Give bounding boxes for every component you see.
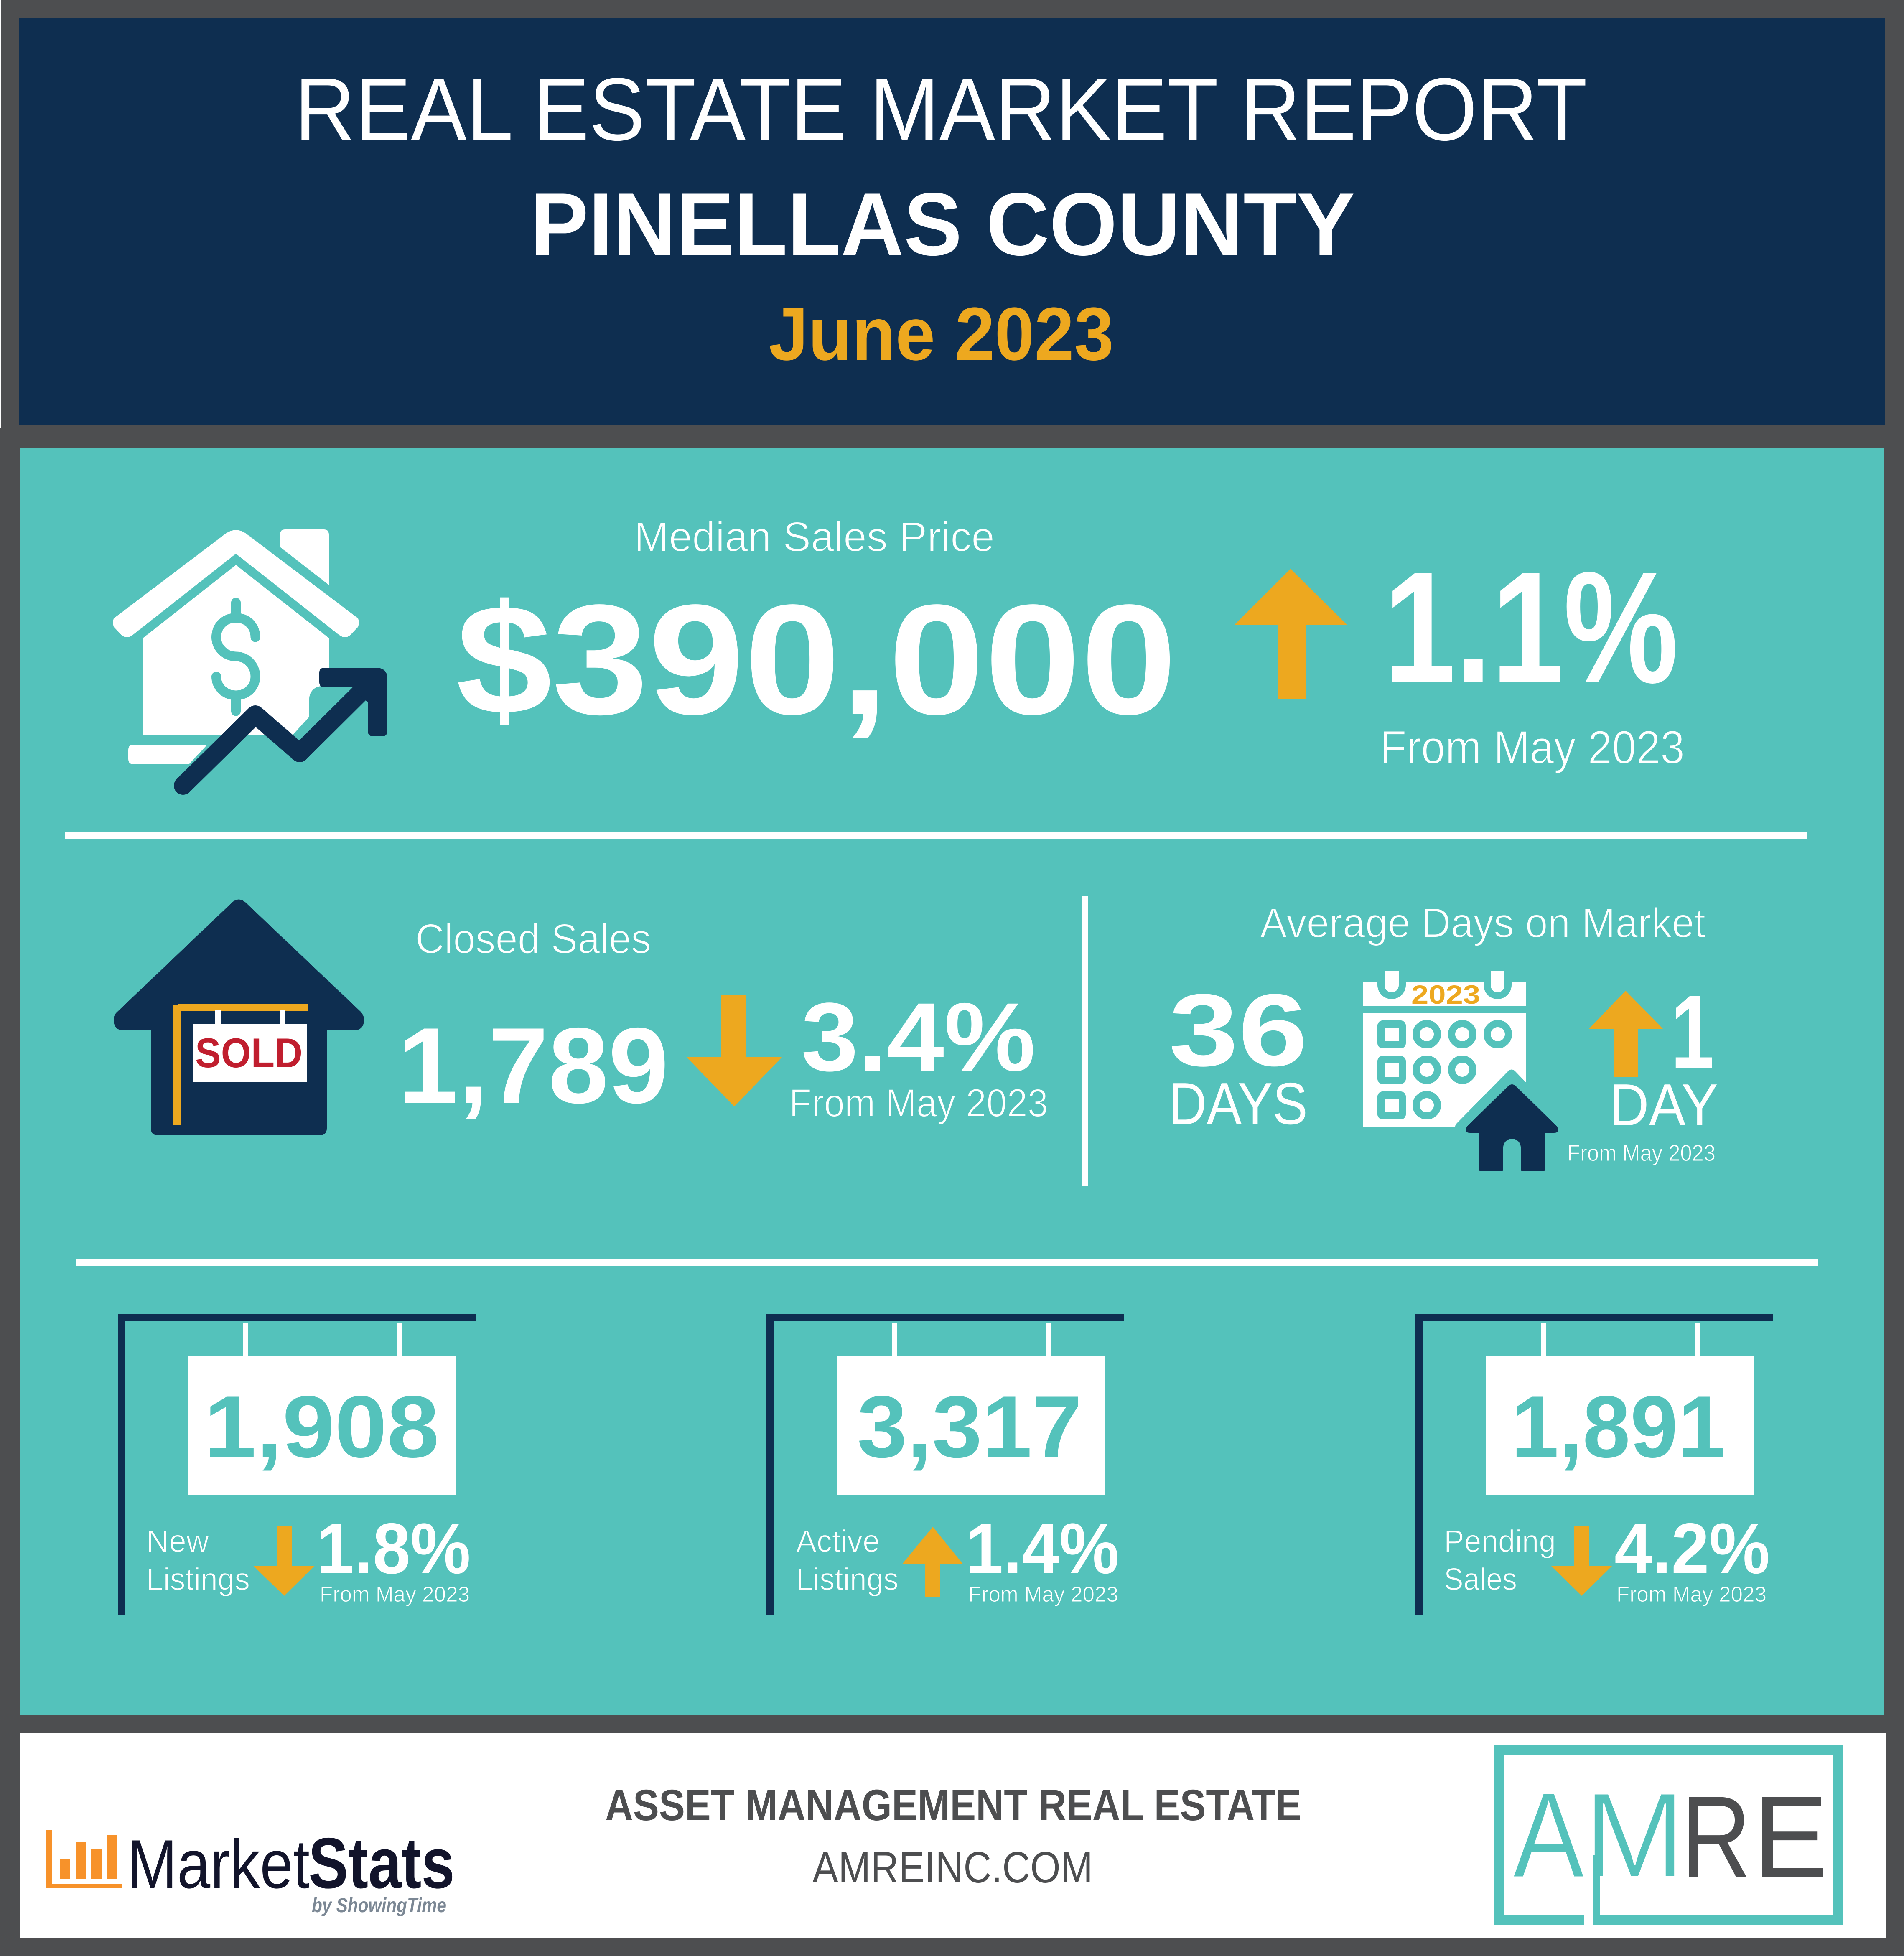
unit: days: DAYS	[1169, 1071, 1308, 1137]
icon: sold house	[114, 899, 364, 1135]
panel: active listings	[766, 1314, 1124, 1615]
logo: AMRE	[1494, 1745, 1843, 1925]
note: comparison period: From May 2023	[1616, 1582, 1767, 1607]
label: active listings: Listings	[796, 1562, 899, 1597]
note: comparison period: From May 2023	[789, 1081, 1048, 1125]
panel: market statistics	[20, 448, 1884, 1715]
value: closed sales: 1,789	[398, 1005, 669, 1126]
arrow: down	[1551, 1526, 1612, 1596]
logo: AMRE: E	[1753, 1772, 1828, 1902]
panel: footer	[20, 1733, 1886, 1938]
icon: house with dollar sign and rising arrow	[113, 529, 387, 786]
note: comparison period: From May 2023	[320, 1582, 470, 1607]
label: average days on market: Average Days on Market	[1260, 900, 1705, 946]
icon: calendar with house: 2023	[1411, 980, 1480, 1010]
panel: header	[19, 18, 1885, 425]
value: pending sales: 1,891	[1511, 1378, 1726, 1476]
note: comparison period: From May 2023	[1380, 721, 1685, 773]
arrow: up	[1234, 569, 1347, 699]
label: median sales price: Median Sales Price	[634, 514, 995, 560]
logo: AMRE: A	[1513, 1768, 1585, 1903]
label: pending sales: Sales	[1444, 1562, 1517, 1597]
arrow: down	[686, 995, 782, 1106]
arrow: up	[902, 1527, 963, 1597]
text: company name: ASSET MANAGEMENT REAL ESTATE	[605, 1781, 1301, 1830]
value: median sales price: $390,000	[456, 572, 1177, 747]
logo: AMRE: R	[1681, 1772, 1751, 1902]
title: REAL ESTATE MARKET REPORT	[295, 60, 1587, 159]
value: new listings: 1,908	[204, 1378, 439, 1476]
note: comparison period: From May 2023	[1567, 1140, 1716, 1166]
value: change: 1.4%	[966, 1508, 1119, 1589]
logo: MarketStats	[46, 1823, 455, 1917]
value: days: 36	[1169, 973, 1308, 1088]
logo: MarketStats: Stats	[308, 1823, 455, 1903]
note: comparison period: From May 2023	[968, 1582, 1118, 1607]
value: price change: 1.1%	[1384, 539, 1678, 716]
label: new listings: Listings	[146, 1562, 250, 1597]
logo: MarketStats: by ShowingTime	[312, 1895, 446, 1917]
label: pending sales: Pending	[1444, 1524, 1556, 1559]
icon: sold house: SOLD	[195, 1030, 303, 1076]
arrow: up	[1588, 991, 1663, 1077]
label: active listings: Active	[796, 1524, 880, 1559]
logo: AMRE: M	[1584, 1768, 1685, 1903]
heading: date: June 2023	[769, 292, 1114, 376]
arrow: down	[253, 1526, 315, 1596]
value: change: 4.2%	[1614, 1508, 1770, 1589]
logo: MarketStats: Market	[127, 1826, 310, 1903]
value: active listings: 3,317	[857, 1378, 1082, 1476]
panel: pending sales	[1415, 1314, 1773, 1615]
unit: day: DAY	[1609, 1072, 1718, 1138]
text: website: AMREINC.COM	[812, 1843, 1093, 1892]
value: closed sales change: 3.4%	[801, 983, 1036, 1091]
panel: new listings	[118, 1314, 476, 1615]
value: day change: 1	[1671, 974, 1714, 1090]
icon: calendar with house	[1363, 971, 1558, 1171]
label: new listings: New	[146, 1524, 209, 1559]
heading: county: PINELLAS COUNTY	[530, 175, 1355, 274]
value: change: 1.8%	[316, 1508, 471, 1589]
label: closed sales: Closed Sales	[415, 916, 651, 962]
